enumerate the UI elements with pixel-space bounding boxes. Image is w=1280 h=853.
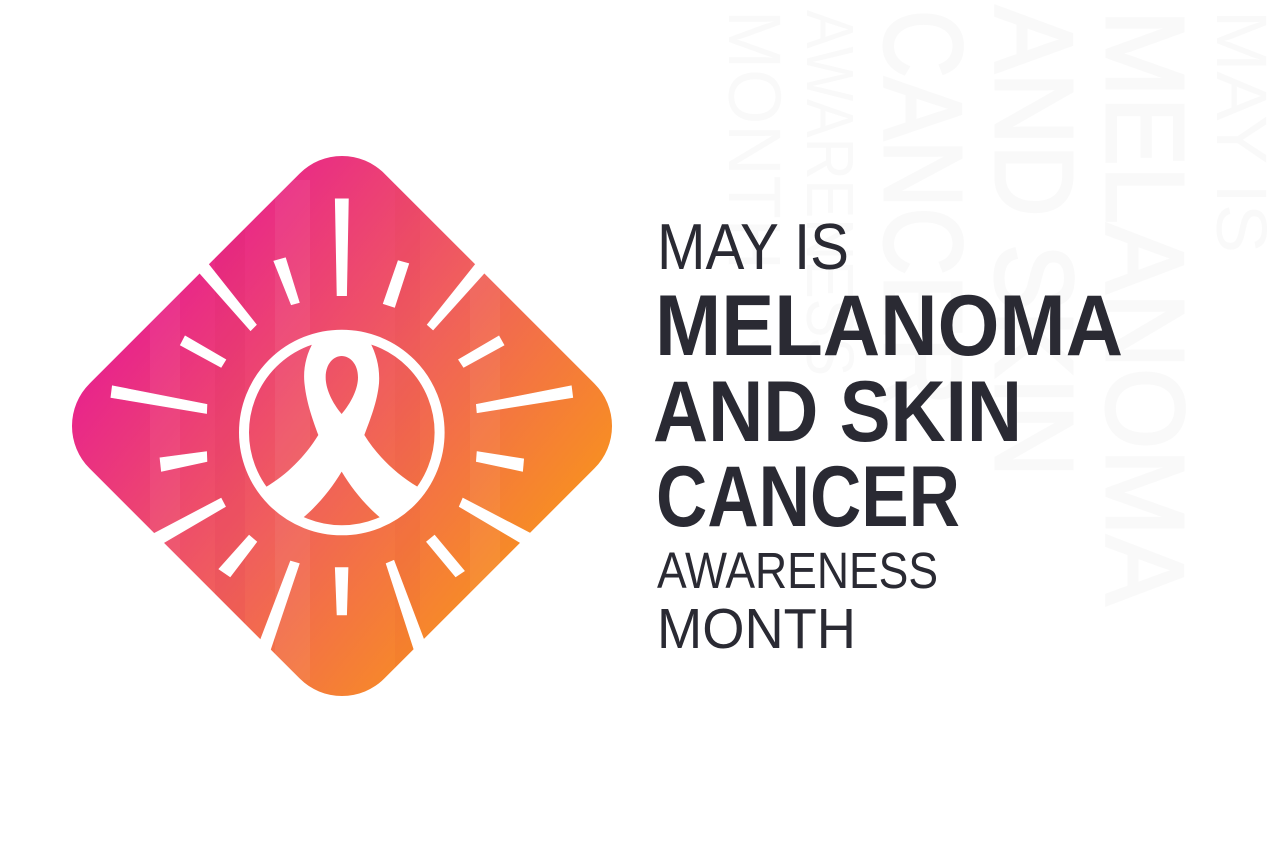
sun rays (111, 199, 573, 659)
ring around ribbon (244, 335, 440, 530)
ghost word: CANCER: CANCER (861, 10, 984, 405)
background ghost lettering (713, 6, 1280, 606)
ghost words: MAY IS: MAY IS (1201, 10, 1280, 253)
ghost word: MONTH: MONTH (713, 10, 796, 270)
line: MAY IS: MAY IS (657, 210, 849, 283)
line: AWARENESS: AWARENESS (657, 542, 938, 599)
ghost word: MELANOMA: MELANOMA (1083, 10, 1206, 606)
headline text block (653, 210, 1123, 661)
ghost word: AWARENESS: AWARENESS (792, 10, 867, 376)
line: MONTH: MONTH (657, 597, 856, 661)
line: MELANOMA: MELANOMA (655, 278, 1123, 374)
logo: gradient diamond badge with ribbon (72, 156, 612, 696)
line: CANCER: CANCER (656, 449, 960, 545)
infographic canvas (72, 156, 1121, 696)
awareness ribbon (265, 337, 417, 518)
line: AND SKIN: AND SKIN (653, 364, 1022, 460)
ghost words: AND SKIN: AND SKIN (972, 6, 1095, 477)
diamond background (72, 156, 612, 696)
